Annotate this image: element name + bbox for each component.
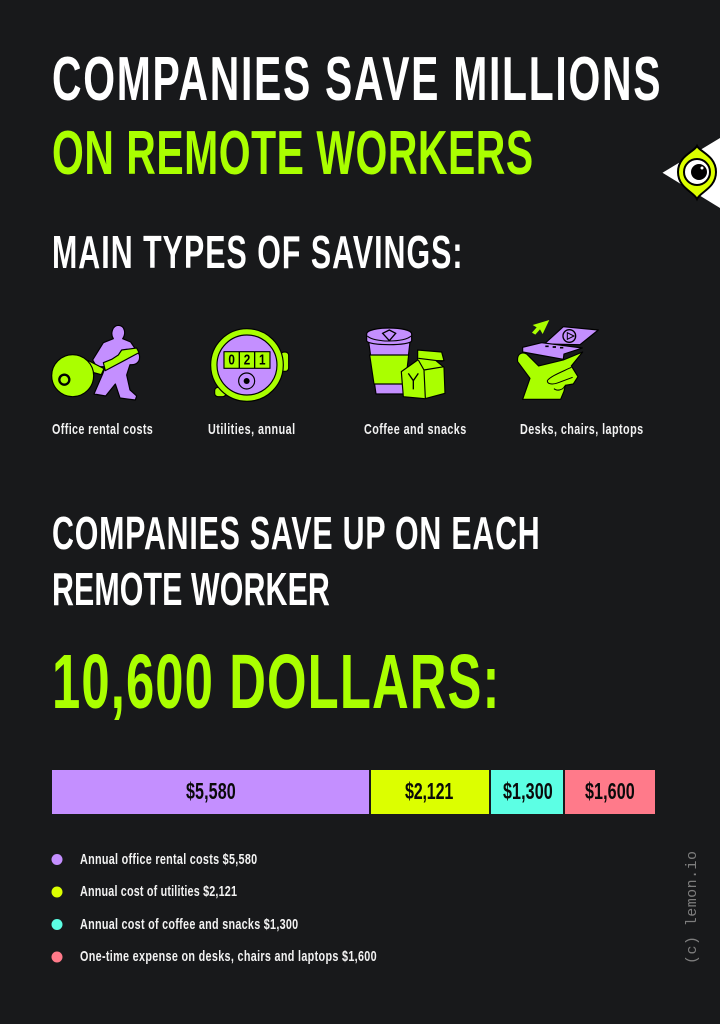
segment: office rental: $5,580 (186, 779, 236, 805)
legend item: office rental: Annual office rental costs $5,580 (80, 850, 257, 867)
legend item: utilities: Annual cost of utilities $2,121 (80, 882, 237, 899)
legend item: equipment: One-time expense on desks, chairs and laptops $1,600 (80, 947, 377, 964)
segment: equipment: $1,600 (585, 779, 635, 805)
label: Desks, chairs, laptops (520, 420, 643, 437)
icon: utility meter: 2 (244, 351, 250, 368)
panel: utilities (208, 329, 295, 437)
segment: utilities: $2,121 (405, 779, 453, 805)
heading: savings per worker: COMPANIES SAVE UP ON EACH (52, 509, 540, 560)
icon: coffee cup and milk carton (367, 328, 445, 399)
icon: utility meter (211, 329, 289, 401)
segment: coffee and snacks: $1,300 (503, 779, 553, 805)
legend (52, 850, 377, 964)
segment: coffee and snacks (491, 770, 563, 814)
legend item: coffee and snacks: Annual cost of coffee and snacks $1,300 (80, 915, 298, 932)
title: COMPANIES SAVE MILLIONS (52, 45, 661, 114)
icon: hand with laptop (518, 320, 598, 399)
panel: desks, chairs, laptops (518, 320, 643, 437)
panel: office rental costs (52, 325, 153, 437)
label: Coffee and snacks (364, 420, 466, 437)
stacked bar chart (52, 770, 655, 814)
heading: savings per worker (52, 509, 540, 616)
icon: eye logo (662, 138, 720, 208)
icon: utility meter: 1 (259, 351, 266, 368)
label: Utilities, annual (208, 420, 295, 437)
label: Office rental costs (52, 420, 153, 437)
segment: utilities (371, 770, 489, 814)
icon: utility meter: 0 (228, 351, 235, 368)
segment: office rental (52, 770, 369, 814)
title (52, 45, 661, 188)
heading: main types of savings: MAIN TYPES OF SAVINGS: (52, 228, 463, 279)
icon: key and person (52, 325, 140, 400)
title: ON REMOTE WORKERS (52, 119, 533, 188)
segment: equipment (565, 770, 655, 814)
big number: 10,600 DOLLARS: (52, 638, 499, 725)
panel: coffee and snacks (364, 328, 466, 437)
credit: (c) lemon.io (684, 851, 701, 964)
heading: savings per worker: REMOTE WORKER (52, 565, 330, 616)
